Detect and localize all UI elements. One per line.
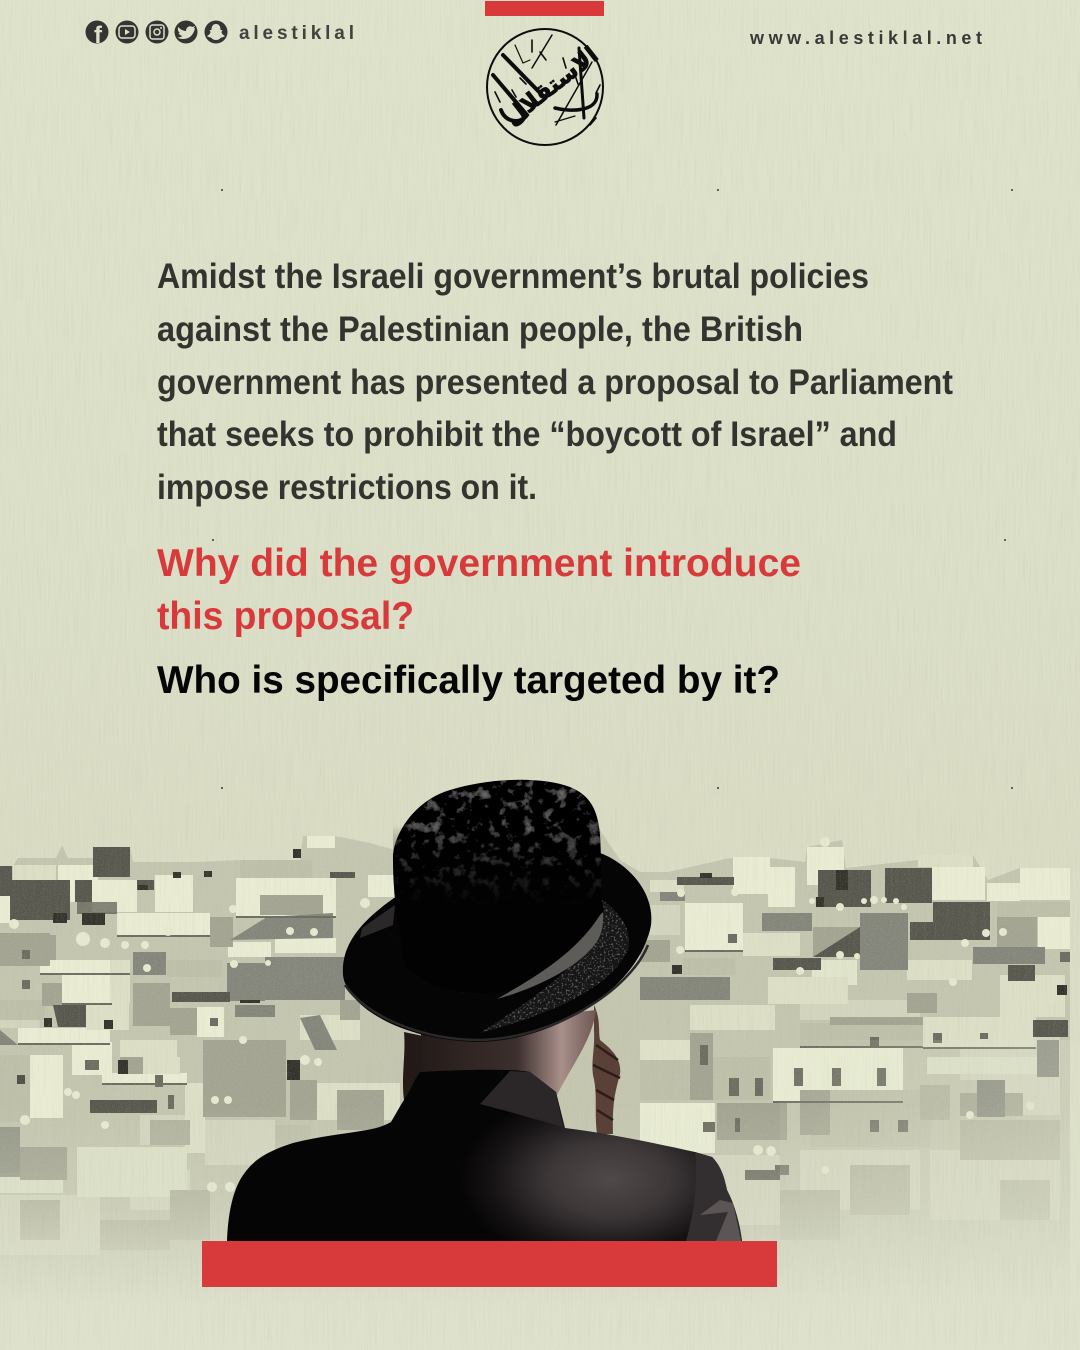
intro paragraph: that seeks to prohibit the “boycott of Israel” and [157,415,897,454]
intro paragraph: government has presented a proposal to Parliament [157,363,953,402]
logo: circular calligraphic emblem [487,29,603,145]
logo diagonal strokes [493,35,600,125]
collar highlight [480,1071,563,1127]
sidelock braid marks [593,1045,620,1120]
fade at lower right of the city [780,1040,1080,1310]
red question heading: this proposal? [157,595,414,638]
icon: facebook: f [94,22,103,49]
intro paragraph: Amidst the Israeli government’s brutal policies [157,257,869,296]
hat brim [343,853,651,1042]
fade of the city into the paper [0,1105,1080,1310]
intro paragraph: against the Palestinian people, the British [157,310,803,349]
hat crown lower shadow [393,825,603,993]
intro paragraph [157,257,953,507]
icon: facebook [86,20,108,49]
black question heading: Who is specifically targeted by it? [157,659,780,702]
icon: youtube [116,20,138,44]
hat brim rim [345,945,648,1040]
social media icons [86,20,228,49]
neck [421,1010,596,1095]
icon: twitter [174,20,198,44]
icon: snapchat [204,20,228,44]
intro paragraph: impose restrictions on it. [157,468,537,507]
fuzzy brim underside [480,900,629,1033]
logo calligraphy: الاستقلال [500,42,603,131]
fuzzy brim left [360,905,395,938]
right sidelock [592,1005,620,1134]
brand handle: alestiklal [239,23,354,44]
red question heading: Why did the government introduce [157,542,801,585]
top red bar [485,1,604,16]
sleeve fold [700,1200,741,1241]
registration specks [212,189,1013,789]
cityscape [0,830,1070,1310]
icon: instagram [146,20,168,44]
jacket [227,1070,742,1241]
left sidelock [403,1032,423,1100]
logo ring [487,29,603,145]
red question heading [157,542,801,638]
figure: man in black hat seen from behind [227,780,742,1241]
website url: www.alestiklal.net [749,28,982,48]
sleeve seam [686,1152,742,1241]
bottom red bar [202,1241,777,1287]
hat crown [393,780,603,993]
hat band [497,912,603,999]
